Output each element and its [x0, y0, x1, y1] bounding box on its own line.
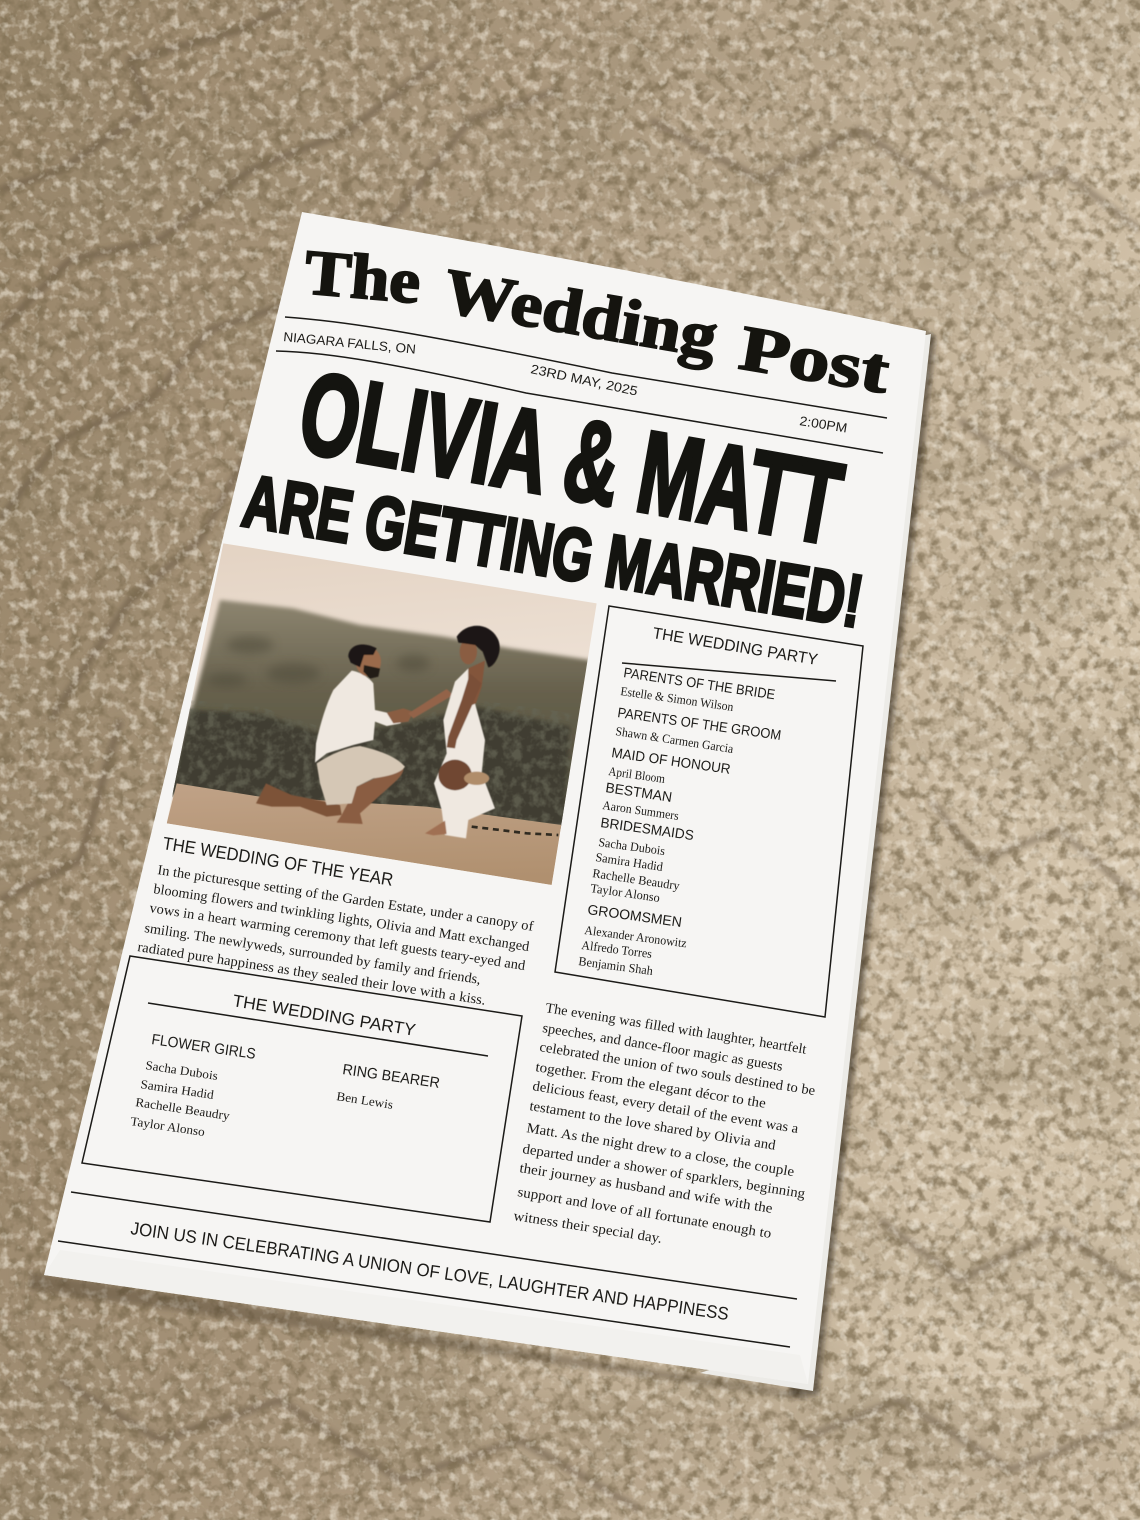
article text: first column: smiling. The newlyweds, surrounded by family and friends,	[143, 921, 482, 988]
party members: Estelle & Simon Wilson	[620, 684, 735, 714]
party members: Sacha Dubois	[598, 835, 666, 858]
party members	[578, 664, 782, 978]
newspaper title: Post	[735, 312, 895, 407]
flower girls list: Rachelle Beaudry	[135, 1095, 231, 1123]
panel heading: THE WEDDING PARTY	[651, 625, 819, 669]
party members: MAID OF HONOUR	[611, 744, 732, 777]
photo: proposal on a hillside	[160, 540, 600, 890]
article text: second column: departed under a shower of sparklers, beginning	[521, 1142, 806, 1202]
party members: Taylor Alonso	[590, 881, 661, 905]
party members: Shawn & Carmen Garcia	[615, 724, 735, 756]
article text: first column: blooming flowers and twinkling lights, Olivia and Matt exchanged	[152, 882, 530, 955]
flower girls list: Samira Hadid	[140, 1077, 216, 1102]
ring bearer	[336, 1061, 441, 1112]
party members: BRIDESMAIDS	[600, 814, 695, 843]
time: 2:00PM	[799, 413, 848, 435]
newspaper title	[302, 236, 895, 407]
man: hands and head	[387, 708, 413, 723]
headline names: OLIVIA & MATT	[291, 347, 851, 569]
article text: second column: support and love of all fortunate enough to	[516, 1185, 772, 1242]
masthead	[276, 236, 895, 453]
newspaper title: Wedding	[439, 255, 723, 372]
party members: Aaron Summers	[602, 798, 680, 823]
panel heading: THE WEDDING PARTY	[231, 991, 417, 1040]
footer banner	[58, 1192, 797, 1347]
party members: Alexander Aronowitz	[584, 923, 688, 950]
newspaper sheet	[30, 212, 936, 1400]
article text: first column	[136, 863, 535, 1009]
article text: second column: speeches, and dance-floor magic as guests	[541, 1021, 784, 1075]
party members: Rachelle Beaudry	[592, 866, 681, 893]
headline subtitle: ARE GETTING MARRIED!	[237, 459, 869, 643]
child	[438, 760, 472, 790]
flower girls list: Sacha Dubois	[145, 1058, 219, 1083]
flower girls list	[130, 1031, 257, 1139]
ring bearer: Ben Lewis	[336, 1089, 394, 1112]
date: 23RD MAY, 2025	[529, 361, 639, 399]
panel: wedding party list	[555, 606, 863, 1017]
party members: Samira Hadid	[595, 850, 665, 874]
article text: second column: testament to the love shared by Olivia and	[528, 1099, 777, 1154]
article heading: THE WEDDING OF THE YEAR	[161, 833, 395, 890]
woman: arms, dress, hair	[408, 689, 453, 718]
man: shirt	[315, 671, 401, 763]
footer text: JOIN US IN CELEBRATING A UNION OF LOVE, LAUGHTER AND HAPPINESS	[129, 1218, 730, 1324]
party members: April Bloom	[608, 764, 666, 786]
location: NIAGARA FALLS, ON	[283, 329, 417, 357]
article text: second column: celebrated the union of two souls destined to be	[538, 1040, 816, 1099]
party members: GROOMSMEN	[587, 901, 683, 930]
article text: second column: Matt. As the night drew to a close, the couple	[525, 1121, 795, 1180]
flower girls list: FLOWER GIRLS	[150, 1031, 257, 1063]
article text: first column: radiated pure happiness as they sealed their love with a kiss.	[136, 940, 487, 1009]
article text: second column: together. From the elegant décor to the	[534, 1060, 767, 1112]
party members: Alfredo Torres	[581, 938, 653, 961]
party members: Benjamin Shah	[578, 954, 655, 978]
article text: second column	[512, 1001, 816, 1247]
panel: wedding party, flower girls and ring bearer	[82, 956, 522, 1222]
article text: second column: The evening was filled with laughter, heartfelt	[544, 1001, 808, 1058]
man: shorts	[317, 746, 405, 805]
party members: BESTMAN	[605, 779, 673, 805]
man: legs	[256, 783, 342, 817]
article text: first column: vows in a heart warming ceremony that left guests teary-eyed and	[148, 901, 526, 974]
ring bearer: RING BEARER	[341, 1061, 441, 1092]
party members: PARENTS OF THE BRIDE	[623, 664, 776, 702]
article text: first column: In the picturesque setting of the Garden Estate, under a canopy of	[156, 863, 535, 935]
newspaper title: The	[302, 236, 424, 317]
article text: second column: delicious feast, every detail of the event was a	[531, 1079, 800, 1137]
article text: second column: their journey as husband and wife with the	[518, 1161, 773, 1217]
party members: PARENTS OF THE GROOM	[617, 704, 782, 743]
article text: second column: witness their special day.	[512, 1209, 663, 1247]
flower girls list: Taylor Alonso	[130, 1114, 206, 1139]
